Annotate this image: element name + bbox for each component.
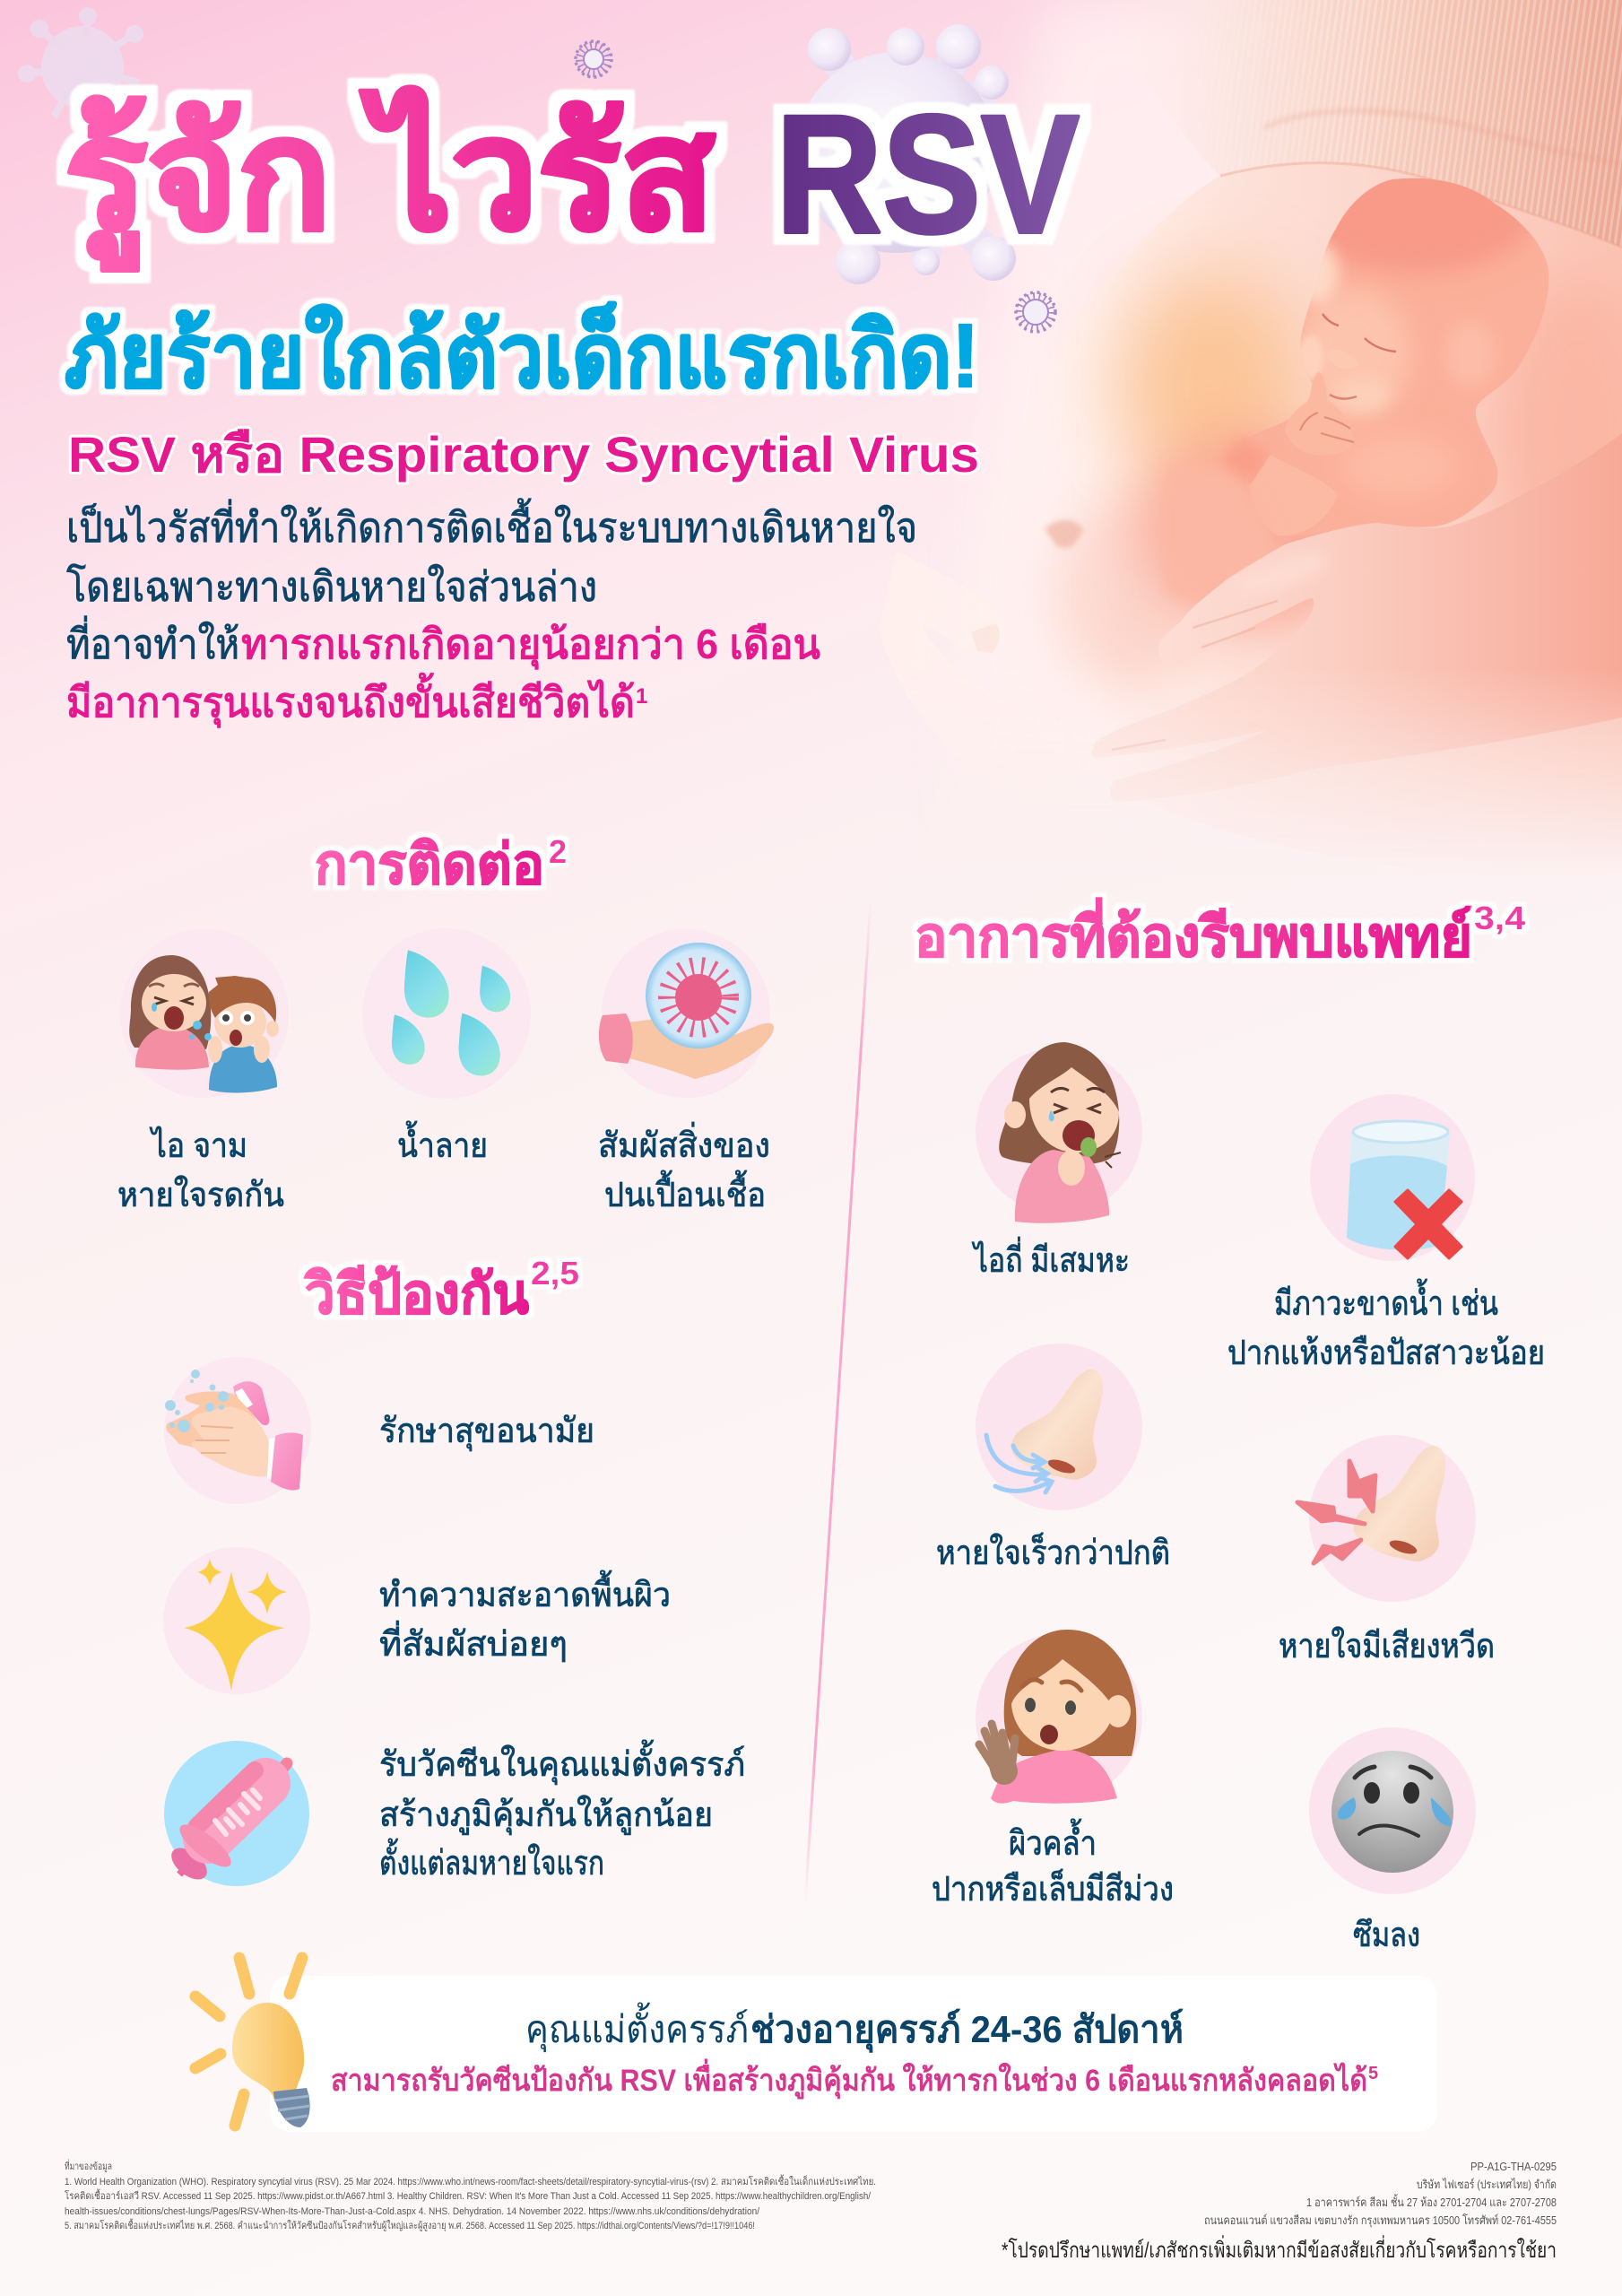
references: โรคติดเชื้ออาร์เอสวี RSV. Accessed 11 Sep 2025. https://www.pidst.or.th/A667.html 3. Healthy Children. RSV: When It's More Than Just a Cold. Accessed 11 Sep 2025. https://www.healthychildren.org/English/ (65, 2188, 872, 2202)
label: ปากแห้งหรือปัสสาวะน้อย (1227, 1335, 1545, 1372)
callout: vaccine recommendation (195, 1958, 1437, 2132)
callout text: สามารถรับวัคซีนป้องกัน RSV เพื่อสร้างภูมิคุ้มกัน ให้ทารกในช่วง 6 เดือนแรกหลังคลอดได้ (331, 2058, 1367, 2100)
label: รับวัคซีนในคุณแม่ตั้งครรภ์ (379, 1739, 745, 1785)
intro text block: ทารกแรกเกิดอายุน้อยกว่า 6 เดือน (241, 621, 821, 670)
label: สร้างภูมิคุ้มกันให้ลูกน้อย (379, 1796, 713, 1835)
icon: washing hands (165, 1370, 303, 1491)
icon: girl coughing phlegm (999, 1042, 1121, 1223)
item: cough with phlegm (971, 1042, 1142, 1280)
label: ไอ จาม (149, 1126, 247, 1165)
right hand (1091, 433, 1622, 802)
label: ไอถี่ มีเสมหะ (971, 1237, 1130, 1280)
heading: transmission: การติดต่อ (315, 834, 544, 896)
heading: symptoms: 3,4 (1474, 900, 1525, 936)
sweater (1183, 0, 1622, 248)
panel: symptoms (915, 898, 1545, 1954)
references: ที่มาของข้อมูล (65, 2159, 112, 2172)
intro text block: 1 (636, 684, 647, 709)
intro text block: เป็นไวรัสที่ทำให้เกิดการติดเชื้อในระบบทางเดินหายใจ (66, 498, 917, 551)
icon: sparkles (184, 1559, 287, 1691)
label: รักษาสุขอนามัย (379, 1413, 594, 1451)
item: wheezing (1279, 1435, 1495, 1665)
item: hygiene (164, 1357, 594, 1504)
RSV definition heading: RSV หรือ Respiratory Syncytial Virus (68, 426, 979, 483)
item: dehydration (1227, 1094, 1545, 1372)
baby hand and arm (1286, 372, 1338, 456)
label: ปนเปื้อนเชื้อ (604, 1170, 766, 1214)
label: ซึมลง (1353, 1917, 1420, 1954)
references: health-issues/conditions/chest-lungs/Pages/RSV-When-Its-More-Than-Just-a-Cold.aspx 4. NHS. Dehydration. 14 November 2022. https://www.nhs.uk/conditions/dehydration/ (65, 2206, 760, 2217)
item: cyanosis (932, 1630, 1174, 1909)
label: หายใจรดกัน (117, 1176, 284, 1214)
references: 5. สมาคมโรคติดเชื้อแห่งประเทศไทย พ.ศ. 2568. คำแนะนำการให้วัคซีนป้องกันโรคสำหรับผู้ใหญ่และผู้สูงอายุ พ.ศ. 2568. Accessed 11 Sep 2025. https://idthai.org/Contents/Views/?d=!17!9!!1046! (65, 2218, 755, 2231)
divider line (805, 900, 871, 1903)
baby thigh (1166, 466, 1275, 601)
company information: บริษัท ไฟเซอร์ (ประเทศไทย) จำกัด (1417, 2178, 1557, 2191)
item: clean surfaces (163, 1547, 671, 1694)
left hand (1091, 745, 1094, 752)
item: contaminated objects (598, 929, 774, 1214)
icon: girl with bluish hand (979, 1630, 1136, 1804)
item: saliva (362, 928, 531, 1165)
virus: large behind RSV (796, 24, 1016, 284)
icon: hand holding virus globe (599, 943, 774, 1079)
label: หายใจเร็วกว่าปกติ (936, 1532, 1170, 1572)
company information: 1 อาคารพาร์ค สีลม ชั้น 27 ห้อง 2701-2704 และ 2707-2708 (1306, 2194, 1557, 2209)
item: lethargy (1309, 1727, 1476, 1954)
company information: PP-A1G-THA-0295 (1470, 2160, 1557, 2173)
label (598, 1122, 770, 1214)
icon: nose with lightning (1297, 1446, 1445, 1563)
label (1227, 1278, 1545, 1372)
icon: droplets (392, 950, 510, 1075)
company information (1204, 2160, 1557, 2228)
icon: nose with arrows (986, 1370, 1103, 1492)
virus: small middle (1016, 292, 1055, 332)
label (379, 1739, 745, 1883)
baby silhouette (1242, 178, 1548, 535)
decorative viruses (22, 11, 1055, 332)
title (65, 80, 1080, 271)
icon: syringe (166, 1763, 287, 1885)
icon: crying grey face (1331, 1751, 1453, 1873)
heading: prevention: วิธีป้องกัน (304, 1264, 529, 1326)
title: RSV: RSV (776, 80, 1080, 268)
label: มีภาวะขาดน้ำ เช่น (1274, 1278, 1498, 1323)
label (932, 1818, 1174, 1909)
label: น้ำลาย (397, 1120, 488, 1165)
intro text block: มีอาการรุนแรงจนถึงขั้นเสียชีวิตได้ (66, 672, 635, 728)
label: ปากหรือเล็บมีสีม่วง (932, 1868, 1174, 1909)
subtitle: ภัยร้ายใกล้ตัวเด็กแรกเกิด! (65, 301, 979, 406)
item: fast breathing (936, 1344, 1170, 1572)
photo: pregnant belly with baby (971, 0, 1622, 853)
references (65, 2159, 876, 2231)
label: หายใจมีเสียงหวีด (1279, 1627, 1495, 1665)
label (379, 1570, 671, 1664)
label: ผิวคล้ำ (1009, 1818, 1097, 1863)
label: ที่สัมผัสบ่อยๆ (379, 1621, 568, 1664)
label: สัมผัสสิ่งของ (598, 1122, 770, 1165)
heading: transmission: 2 (549, 833, 567, 870)
heading: prevention: 2,5 (531, 1255, 579, 1292)
item: vaccination (164, 1739, 745, 1886)
virus: faint top-left (22, 11, 140, 117)
heading: symptoms: อาการที่ต้องรีบพบแพทย์ (915, 898, 1472, 969)
intro text block: ที่อาจทำให้ (66, 615, 239, 667)
item: cough, sneeze, breath (117, 929, 289, 1214)
company information: ถนนคอนแวนต์ แขวงสีลม เขตบางรัก กรุงเทพมหานคร 10500 โทรศัพท์ 02-761-4555 (1204, 2213, 1557, 2228)
label: ทำความสะอาดพื้นผิว (379, 1570, 671, 1614)
title: รู้จัก ไวรัส: รู้จัก ไวรัส (65, 87, 715, 271)
label (117, 1126, 284, 1214)
icon: light bulb (195, 1958, 310, 2127)
callout text (331, 2002, 1378, 2100)
callout text: คุณแม่ตั้งครรภ์ (525, 2002, 749, 2053)
intro text block: โดยเฉพาะทางเดินหายใจส่วนล่าง (66, 563, 597, 610)
icon: glass with red cross (1347, 1121, 1462, 1258)
virus: small top (576, 41, 612, 77)
callout text: ช่วงอายุครรภ์ 24-36 สัปดาห์ (750, 2008, 1184, 2053)
label: ตั้งแต่ลมหายใจแรก (379, 1838, 604, 1883)
panel: transmission (117, 833, 774, 1214)
icon: coughing girl and boy (129, 955, 279, 1092)
references: 1. World Health Organization (WHO). Respiratory syncytial virus (RSV). 25 Mar 2024. https://www.who.int/news-room/fact-sheets/detail/respiratory-syncytial-virus-(rsv) 2. สมาคมโรคติดเชื้อในเด็กแห่งประเทศไทย. (65, 2174, 876, 2187)
intro text block (66, 498, 917, 728)
callout text: 5 (1368, 2064, 1378, 2083)
panel: prevention (163, 1255, 745, 1886)
